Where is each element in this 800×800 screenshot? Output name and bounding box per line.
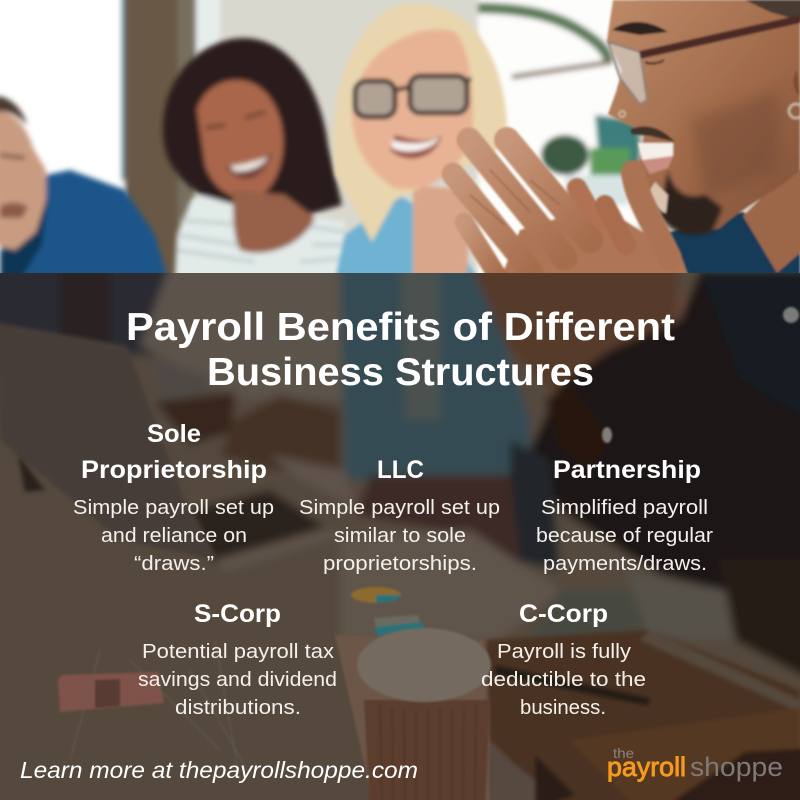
title: Payroll Benefits of Different bbox=[126, 306, 675, 349]
man on the right bbox=[607, 0, 800, 280]
desk, laptop and people under the overlay bbox=[0, 265, 800, 800]
column: Partnership: because of regular bbox=[536, 525, 713, 547]
laptop edge detail bbox=[18, 455, 45, 492]
clear upper photo bbox=[0, 0, 800, 290]
column: LLC: LLC bbox=[377, 456, 424, 484]
office background bbox=[0, 0, 800, 290]
woman with dark hair bbox=[163, 38, 345, 280]
column: Sole Proprietorship: Proprietorship bbox=[81, 456, 267, 484]
column: S-Corp: S-Corp bbox=[194, 600, 281, 628]
column: LLC: Simple payroll set up bbox=[299, 497, 500, 519]
column: Sole Proprietorship: and reliance on bbox=[101, 525, 247, 547]
notepaper, chart and coffee cup bbox=[58, 587, 490, 800]
coffee cup bbox=[357, 628, 491, 800]
logo: payroll bbox=[607, 752, 686, 782]
column: S-Corp: distributions. bbox=[175, 697, 301, 719]
column: C-Corp: business. bbox=[520, 697, 606, 719]
column: C-Corp: deductible to the bbox=[481, 669, 646, 691]
column: Partnership bbox=[536, 456, 713, 575]
column: S-Corp: Potential payroll tax bbox=[142, 641, 334, 663]
column: C-Corp: C-Corp bbox=[519, 600, 608, 628]
column: S-Corp: savings and dividend bbox=[138, 669, 337, 691]
column: S-Corp bbox=[138, 600, 337, 719]
blonde woman with glasses bbox=[333, 4, 507, 280]
title bbox=[126, 306, 675, 394]
notebook on desk bbox=[486, 630, 800, 800]
logo: the bbox=[613, 745, 634, 761]
darkened lower photo bbox=[0, 265, 800, 800]
column: Partnership: Partnership bbox=[553, 456, 701, 484]
shirt buttons and cuff button bbox=[602, 307, 799, 443]
logo: shoppe bbox=[690, 752, 783, 782]
column: LLC bbox=[299, 456, 500, 575]
man on the left bbox=[0, 96, 168, 280]
column: LLC: similar to sole bbox=[334, 525, 466, 547]
column: Sole Proprietorship bbox=[73, 420, 274, 575]
column: Sole Proprietorship: “draws.” bbox=[134, 553, 214, 575]
logo bbox=[607, 745, 783, 782]
column: Sole Proprietorship: Simple payroll set up bbox=[73, 497, 274, 519]
column: C-Corp: Payroll is fully bbox=[497, 641, 631, 663]
column: LLC: proprietorships. bbox=[323, 553, 477, 575]
column: Partnership: payments/draws. bbox=[543, 553, 707, 575]
title: Business Structures bbox=[207, 351, 594, 394]
call to action: Learn more at thepayrollshoppe.com bbox=[20, 757, 418, 783]
column: Partnership: Simplified payroll bbox=[541, 497, 708, 519]
laptop lid bbox=[0, 322, 217, 560]
clasped hands bbox=[453, 140, 690, 280]
column: Sole Proprietorship: Sole bbox=[147, 420, 201, 448]
column: C-Corp bbox=[481, 600, 646, 719]
